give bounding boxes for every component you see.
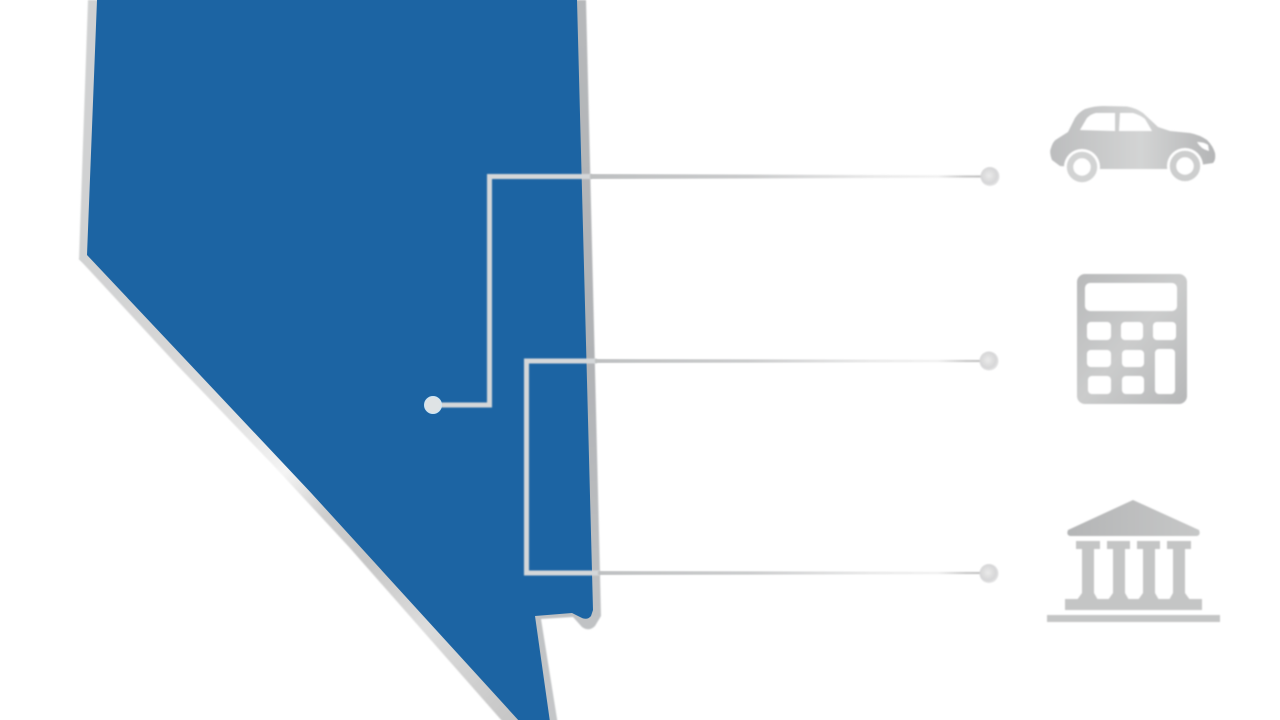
segment outside the map xyxy=(590,174,985,179)
windows xyxy=(1080,113,1115,131)
connector: map point to car icon xyxy=(424,167,1000,414)
calculator body xyxy=(1077,274,1187,404)
upper segment outside the map xyxy=(595,359,985,363)
car connector end dot xyxy=(980,167,1000,186)
icon: car xyxy=(1050,106,1215,185)
segment inside the map xyxy=(526,361,600,573)
rear wheel xyxy=(1064,149,1100,185)
bank roof xyxy=(1067,500,1200,536)
map diagonal border xyxy=(79,250,530,720)
segment inside the map xyxy=(433,176,592,405)
icon: calculator xyxy=(1077,274,1187,404)
map fill xyxy=(87,0,593,720)
headlight xyxy=(1197,142,1209,151)
bank columns xyxy=(1076,541,1191,600)
map left border xyxy=(79,0,110,275)
calculator connector end dot xyxy=(980,352,998,370)
bank plinth xyxy=(1065,599,1202,610)
map: state silhouette with silver border xyxy=(79,0,601,720)
bank floor xyxy=(1047,615,1220,622)
car body xyxy=(1050,106,1215,169)
front wheel xyxy=(1167,148,1203,184)
calculator keys xyxy=(1087,322,1176,394)
connector: calculator icon to bank icon xyxy=(526,352,998,575)
map point marker xyxy=(424,396,442,414)
bank connector end dot xyxy=(980,564,998,583)
lower segment outside the map xyxy=(598,571,985,575)
calculator screen xyxy=(1085,283,1177,311)
map right border xyxy=(530,0,601,720)
icon: bank xyxy=(1047,500,1220,622)
